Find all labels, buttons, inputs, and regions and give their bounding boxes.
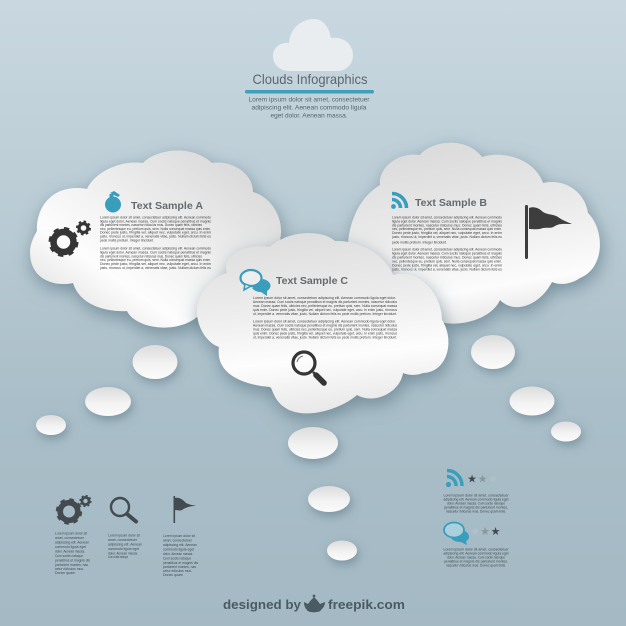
- text block: cloud C: quis enim. Donec pede justo, fringilla vel, aliquet nec, vulputate eget, arcu. In enim justo, rhoncus: [253, 308, 397, 312]
- text block: flag caption: penatibus et magnis dis: [163, 560, 198, 565]
- text block: bubbles caption: Lorem ipsum dolor sit amet, consectetuer: [444, 546, 509, 552]
- thought bubbles: right trail: [471, 335, 581, 442]
- text block: cloud B: Lorem ipsum dolor sit amet, consectetuer adipiscing elit. Aenean commodo: [392, 216, 502, 220]
- heading: Text Sample A: Text Sample A: [131, 200, 203, 212]
- text block: cloud C: quis enim. Donec pede justo, fringilla vel, aliquet nec, vulputate eget, arcu. In enim justo, rhoncus: [253, 332, 397, 336]
- text block: gears caption: commodo ligula eget: [55, 544, 87, 549]
- panel: cloud C: [197, 233, 448, 413]
- text block: gears caption: Donec quam: [55, 570, 75, 575]
- icon: star rating two of three: [470, 526, 501, 538]
- text block: flag caption: commodo ligula eget: [163, 546, 195, 552]
- text block: flag caption: amet, consectetuer: [163, 538, 193, 542]
- text block: gears caption: amet, consectetuer: [55, 535, 85, 540]
- text block: cloud B: dis parturient montes, nascetur ridiculus mus. Donec quam felis, ultricies: [392, 223, 502, 227]
- text block: cloud B: ligula eget dolor. Aenean massa. Cum sociis natoque penatibus et magnis: [392, 252, 502, 256]
- icon: RSS: [391, 194, 406, 209]
- icon: small magnifier: [111, 498, 136, 522]
- text block: flag caption: dolor. Aenean massa.: [163, 551, 193, 556]
- text block: magnifier caption: amet, consectetuer: [108, 537, 138, 542]
- thought bubbles: center trail: [288, 427, 357, 560]
- icon: star rating one of three: [467, 474, 498, 486]
- text block: magnifier caption: commodo ligula eget: [108, 546, 140, 551]
- icon: star rating one of three: ★: [478, 474, 488, 486]
- text block: magnifier caption: [108, 532, 142, 559]
- text block: RSS caption: Lorem ipsum dolor sit amet, consectetuer: [444, 492, 509, 498]
- text block: cloud A: justo, rhoncus ut, imperdiet a, venenatis vitae, justo. Nullam dictum felis eu: [99, 234, 211, 238]
- text block: magnifier caption: Lorem ipsum dolor sit: [108, 532, 141, 538]
- icon: gears: [50, 222, 90, 255]
- footer credit: freepik.com: [328, 597, 405, 612]
- text block: gears caption: Lorem ipsum dolor sit: [55, 530, 88, 536]
- text block: cloud C: Aenean massa. Cum sociis natoque penatibus et magnis dis parturient montes, nascetur ridiculus: [253, 300, 397, 304]
- text block: gears caption: dolor. Aenean massa.: [55, 548, 85, 554]
- text block: gears caption: cetur ridiculus mus.: [55, 566, 84, 571]
- text block: gears caption: adipiscing elit. Aenean: [55, 540, 89, 544]
- text block: RSS caption: [444, 492, 509, 514]
- text block: bubbles caption: [444, 546, 509, 568]
- text block: RSS caption: nascetur ridiculus mus. Donec quam felis.: [446, 508, 506, 514]
- text block: cloud A: nec, pellentesque eu, pretium quis, sem. Nulla consequat massa quis enim.: [100, 258, 211, 262]
- text block: cloud C: Lorem ipsum dolor sit amet, consectetuer adipiscing elit. Aenean commodo ligula eget dolor.: [253, 320, 396, 324]
- text block: cloud B: Lorem ipsum dolor sit amet, consectetuer adipiscing elit. Aenean commodo: [392, 248, 502, 252]
- text block: flag caption: [163, 533, 198, 577]
- text block: magnifier caption: adipiscing elit. Aenean: [108, 542, 142, 546]
- text block: cloud A: Donec pede justo, fringilla vel, aliquet nec, vulputate eget, arcu. In enim: [100, 231, 211, 235]
- text block: cloud A: pede mollis pretium. Integer tincidunt.: [100, 238, 154, 242]
- text block: gears caption: Cum sociis natoque: [55, 553, 83, 558]
- icon: small gears: [57, 496, 91, 523]
- text block: flag caption: Lorem ipsum dolor sit: [163, 533, 196, 538]
- text block: cloud A: justo, rhoncus ut, imperdiet a, venenatis vitae, justo. Nullam dictum felis eu: [99, 266, 211, 270]
- text block: magnifier caption: Cum sociis natoque: [108, 554, 128, 559]
- text block: gears caption: penatibus et magnis dis: [55, 558, 90, 562]
- text block: cloud B: nec, pellentesque eu, pretium quis, sem. Nulla consequat massa quis enim.: [392, 227, 502, 231]
- title: Clouds Infographics: [252, 72, 368, 87]
- text block: cloud A: Lorem ipsum dolor sit amet, consectetuer adipiscing elit. Aenean commodo: [100, 216, 211, 220]
- icon: small flag: [174, 496, 196, 523]
- text block: cloud A: Lorem ipsum dolor sit amet, consectetuer adipiscing elit. Aenean commodo: [100, 246, 211, 250]
- text block: cloud B: ligula eget dolor. Aenean massa. Cum sociis natoque penatibus et magnis: [392, 219, 502, 223]
- icon: crown logo: [304, 595, 325, 612]
- text block: cloud A: ligula eget dolor. Aenean massa. Cum sociis natoque penatibus et magnis: [100, 219, 211, 223]
- text block: cloud C: [253, 296, 398, 340]
- text block: cloud A: dis parturient montes, nascetur ridiculus mus. Donec quam felis, ultricies: [100, 254, 202, 258]
- icon: star rating one of three: ★: [467, 474, 477, 486]
- text block: cloud C: ut, imperdiet a, venenatis vitae, justo. Nullam dictum felis eu pede mollis pretium. Integer tincidunt.: [253, 336, 397, 340]
- text block: cloud C: mus. Donec quam felis, ultricies nec, pellentesque eu, pretium quis, sem. Nulla consequat massa: [253, 304, 398, 308]
- text block: cloud B: Donec pede justo, fringilla vel, aliquet nec, vulputate eget, arcu. In enim: [392, 231, 502, 235]
- text block: cloud A: [99, 216, 211, 270]
- text block: cloud B: Donec pede justo, fringilla vel, aliquet nec, vulputate eget, arcu. In enim: [392, 264, 502, 268]
- icon: speech bubbles: [240, 270, 270, 296]
- icon: header cloud: [273, 19, 353, 71]
- thought bubbles: left trail: [36, 345, 178, 435]
- text block: cloud C: mus. Donec quam felis, ultricies nec, pellentesque eu, pretium quis, sem. Nulla consequat massa: [253, 328, 398, 332]
- text block: bubbles caption: adipiscing elit. Aenean commodo ligula eget: [444, 550, 509, 556]
- subtitle text: Lorem ipsum dolor sit amet, consectetuer: [248, 96, 370, 104]
- text block: RSS caption: dolor. Aenean massa. Cum sociis natoque: [447, 500, 505, 506]
- text block: cloud B: nec, pellentesque eu, pretium quis, sem. Nulla consequat massa quis enim.: [392, 260, 502, 264]
- text block: magnifier caption: dolor. Aenean massa.: [108, 550, 138, 556]
- panel: cloud B: [348, 143, 600, 324]
- text block: flag caption: Cum sociis natoque: [163, 556, 191, 560]
- subtitle text: eget dolor. Aenean massa.: [270, 112, 348, 120]
- icon: star rating two of three: ★: [480, 526, 490, 538]
- text block: gears caption: [55, 530, 90, 575]
- heading: Text Sample B: Text Sample B: [415, 197, 487, 209]
- text block: cloud A: ligula eget dolor. Aenean massa. Cum sociis natoque penatibus et magnis: [100, 250, 211, 254]
- text block: cloud B: pede mollis pretium. Integer tincidunt.: [392, 240, 447, 244]
- text block: cloud B: [391, 216, 502, 272]
- heading: Text Sample C: Text Sample C: [276, 275, 348, 287]
- icon: bomb: [105, 191, 121, 212]
- text block: cloud B: dis parturient montes, nascetur ridiculus mus. Donec quam felis, ultricies: [392, 256, 502, 260]
- text block: bubbles caption: dolor. Aenean massa. Cum sociis natoque: [447, 554, 505, 560]
- title underline bar: [245, 90, 374, 94]
- text block: gears caption: parturient montes, nas: [55, 562, 88, 567]
- text block: RSS caption: adipiscing elit. Aenean commodo ligula eget: [444, 496, 509, 502]
- icon: small speech bubbles: [444, 522, 469, 545]
- icon: magnifier: [293, 352, 324, 383]
- footer credit: designed by: [223, 597, 302, 612]
- text block: bubbles caption: nascetur ridiculus mus. Donec quam felis.: [446, 562, 506, 568]
- text block: flag caption: Donec quam: [163, 572, 183, 577]
- text block: cloud A: Donec pede justo, fringilla vel, aliquet nec, vulputate eget, arcu. In enim: [100, 262, 211, 266]
- icon: flag: [525, 205, 572, 259]
- text block: flag caption: parturient montes, nas: [163, 564, 196, 569]
- icon: small RSS: [446, 470, 462, 487]
- text block: bubbles caption: penatibus et magnis dis parturient montes,: [444, 558, 508, 564]
- text block: flag caption: cetur ridiculus mus.: [163, 568, 192, 573]
- text block: cloud C: Lorem ipsum dolor sit amet, consectetuer adipiscing elit. Aenean commodo ligula eget dolor.: [253, 296, 396, 300]
- icon: star rating two of three: ★: [470, 526, 480, 538]
- icon: star rating two of three: ★: [491, 526, 501, 538]
- text block: cloud B: justo, rhoncus ut, imperdiet a, venenatis vitae, justo. Nullam dictum felis eu: [391, 268, 502, 272]
- footer credit: [223, 595, 405, 612]
- text block: RSS caption: penatibus et magnis dis parturient montes,: [444, 504, 508, 510]
- text block: cloud A: dis parturient montes, nascetur ridiculus mus. Donec quam felis, ultricies: [100, 223, 202, 227]
- text block: cloud C: ut, imperdiet a, venenatis vitae, justo. Nullam dictum felis eu pede mollis pretium. Integer tincidunt.: [253, 312, 397, 316]
- subtitle text: adipiscing elit. Aenean commodo ligula: [252, 104, 367, 112]
- text block: cloud B: justo, rhoncus ut, imperdiet a, venenatis vitae, justo. Nullam dictum felis eu: [391, 235, 502, 239]
- icon: star rating one of three: ★: [488, 474, 498, 486]
- panel: cloud A: [30, 150, 281, 328]
- subtitle text: [248, 96, 370, 120]
- text block: cloud A: nec, pellentesque eu, pretium quis, sem. Nulla consequat massa quis enim.: [100, 227, 211, 231]
- text block: flag caption: adipiscing elit. Aenean: [163, 542, 197, 547]
- text block: cloud C: Aenean massa. Cum sociis natoque penatibus et magnis dis parturient montes, nascetur ridiculus: [253, 324, 397, 328]
